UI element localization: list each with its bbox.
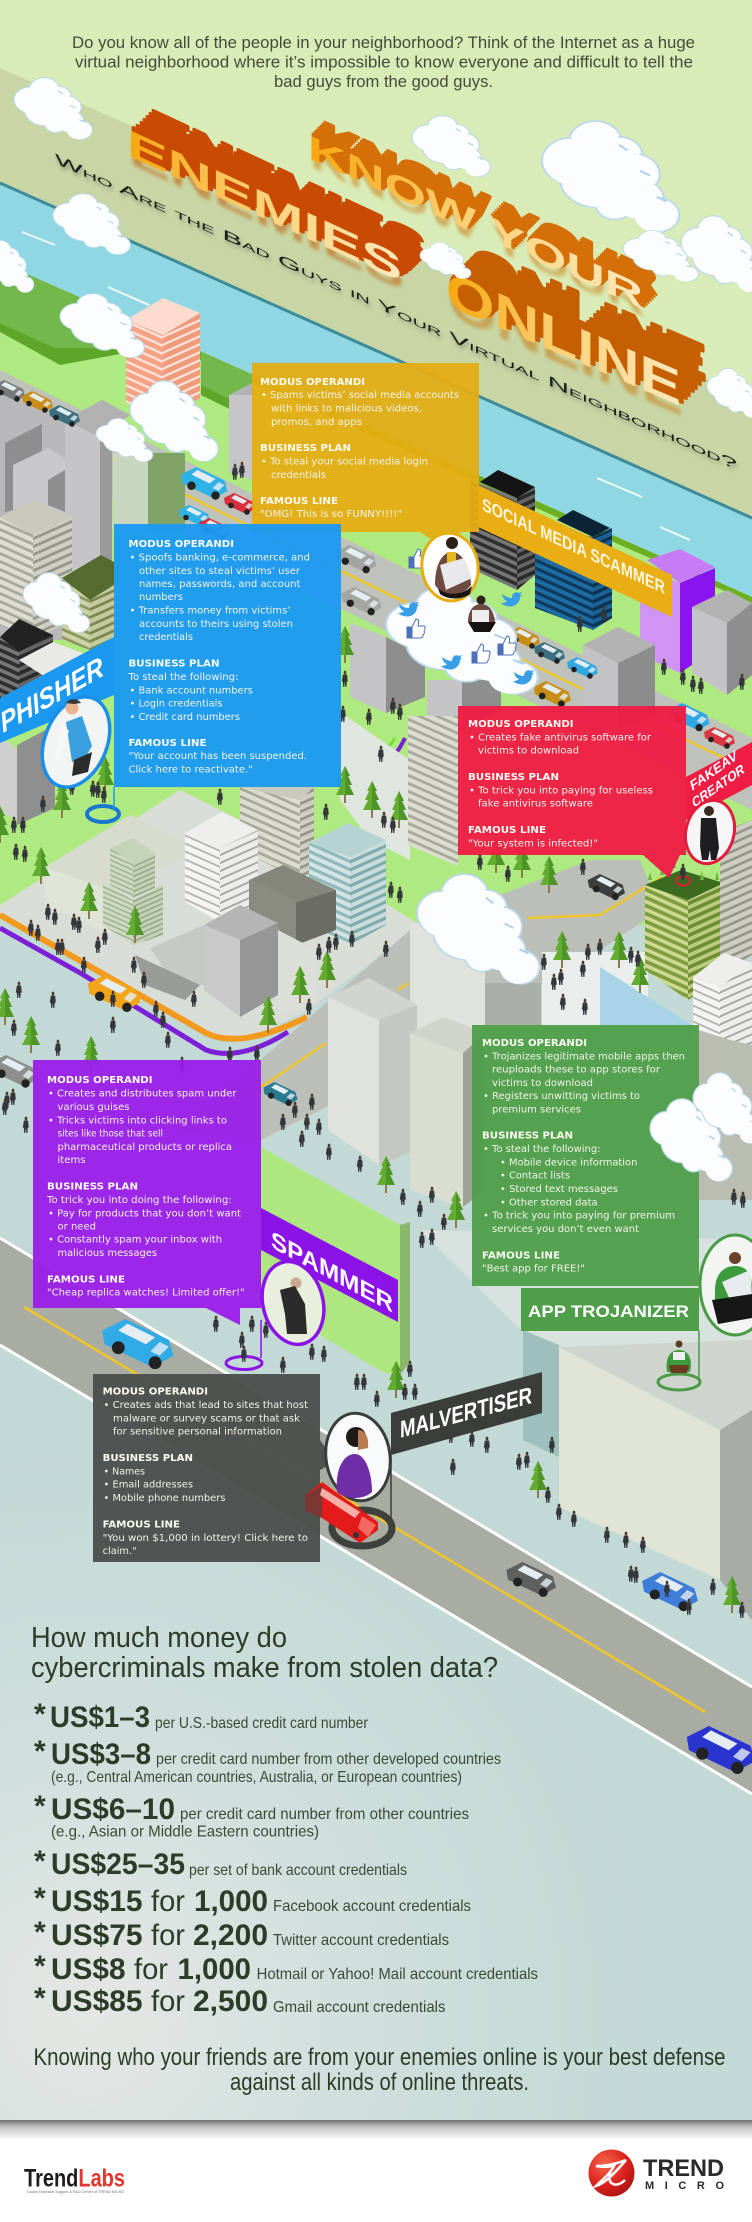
panel: spammer bbox=[33, 1060, 261, 1325]
panel: malvertiser: malware or survey scams or that ask bbox=[113, 1413, 300, 1424]
panel: phisher: • Bank account numbers bbox=[130, 686, 253, 696]
building: grey centre 2 bbox=[427, 680, 501, 730]
panel: phisher: • Transfers money from victims’ bbox=[130, 606, 290, 617]
panel: social media scammer: MODUS OPERANDI bbox=[260, 377, 365, 388]
portrait: social media scammer bbox=[418, 529, 482, 605]
panel: fakeav creator: FAMOUS LINE bbox=[468, 825, 546, 836]
panel: phisher bbox=[114, 524, 341, 787]
cloud near green panel bbox=[417, 874, 540, 984]
green and purple paths near phisher bbox=[342, 735, 405, 766]
panel: app trojanizer: • Contact lists bbox=[500, 1171, 570, 1182]
panel: spammer: malicious messages bbox=[58, 1248, 157, 1259]
title block bbox=[55, 102, 738, 477]
panel: phisher: credentials bbox=[139, 632, 193, 643]
closing statement bbox=[34, 2044, 726, 2096]
price 2: * bbox=[34, 1735, 46, 1768]
lower road bbox=[0, 1238, 752, 1794]
panel: social media scammer bbox=[252, 363, 479, 545]
marker: phisher bbox=[87, 787, 119, 822]
building: grey yellow box backdrop bbox=[229, 383, 252, 480]
title line: Know Your: KNOW YOUR bbox=[322, 114, 657, 303]
panel: phisher: BUSINESS PLAN bbox=[128, 658, 220, 670]
intro text bbox=[72, 34, 695, 91]
building: pale green stack bbox=[103, 838, 163, 945]
price 3: per credit card number from other countries bbox=[180, 1806, 469, 1823]
white plaza bbox=[542, 952, 648, 1027]
portrait: app trojanizer bbox=[700, 1235, 752, 1335]
panel: phisher: • Credit card numbers bbox=[130, 712, 240, 723]
building: green fakeav tower bbox=[645, 860, 724, 1000]
title line: Online: ONLINE bbox=[463, 244, 698, 401]
building: light blue bbox=[600, 967, 695, 1040]
panel: fakeav creator: • To trick you into paying for useless bbox=[469, 786, 653, 797]
panel: app trojanizer: premium services bbox=[492, 1104, 581, 1115]
panel: app trojanizer: services you don’t even want bbox=[492, 1224, 639, 1235]
price 4 bbox=[34, 1845, 407, 1881]
price 7: US$8 bbox=[51, 1953, 126, 1986]
price 3: * bbox=[34, 1790, 46, 1823]
building: tall pale 2 bbox=[410, 1017, 485, 1207]
panel: malvertiser: FAMOUS LINE bbox=[103, 1519, 180, 1530]
banner: fakeav creator: FAKEAV bbox=[689, 748, 739, 795]
subtitle bbox=[55, 152, 738, 477]
panel: malvertiser: BUSINESS PLAN bbox=[103, 1453, 193, 1464]
panel: app trojanizer: • Trojanizes legitimate mobile apps then bbox=[483, 1052, 685, 1062]
portrait: fakeav creator bbox=[679, 795, 741, 869]
panel: phisher: • Login credentials bbox=[130, 698, 222, 710]
panel: spammer: items bbox=[58, 1155, 86, 1166]
intro text: virtual neighborhood where it’s impossible to know everyone and difficult to tell the bbox=[75, 54, 693, 72]
panel: app trojanizer: • Other stored data bbox=[500, 1197, 598, 1208]
heading: cybercriminals make from stolen data? bbox=[31, 1652, 498, 1684]
building: beige striped left bbox=[0, 500, 72, 640]
banner: app trojanizer: APP TROJANIZER bbox=[528, 1302, 689, 1321]
building: purple bbox=[640, 549, 715, 673]
title line: Online: ONLINE bbox=[467, 240, 702, 397]
marker: malvertiser bbox=[332, 1455, 392, 1546]
river bbox=[0, 182, 752, 597]
panel: spammer: • Tricks victims into clicking links to bbox=[48, 1115, 227, 1126]
panel: spammer: MODUS OPERANDI bbox=[47, 1075, 152, 1086]
panel: app trojanizer: • Mobile device information bbox=[500, 1158, 637, 1169]
panel: social media scammer: • Spams victims’ social media accounts bbox=[261, 390, 459, 401]
panel: malvertiser: MODUS OPERANDI bbox=[103, 1387, 208, 1398]
building: grey far right bbox=[692, 590, 752, 695]
price 5 bbox=[34, 1882, 471, 1918]
title line: Know Your: KNOW YOUR bbox=[312, 124, 647, 313]
marker: app trojanizer bbox=[658, 1331, 700, 1390]
price 5: 1,000 bbox=[194, 1885, 268, 1918]
logo: Trend Micro: TREND bbox=[643, 2155, 724, 2182]
title line: Online: ONLINE bbox=[460, 247, 695, 404]
panel: app trojanizer: reuploads these to app stores for bbox=[492, 1065, 661, 1076]
price 6: US$75 bbox=[51, 1919, 142, 1952]
upper road bbox=[0, 370, 752, 810]
title line: Online: ONLINE bbox=[456, 251, 691, 408]
price 7: * bbox=[34, 1950, 46, 1983]
panel: social media scammer: • To steal your social media login bbox=[261, 456, 428, 468]
panel: fakeav creator bbox=[458, 706, 686, 878]
price 1: * bbox=[34, 1698, 46, 1731]
panel: app trojanizer: FAMOUS LINE bbox=[482, 1250, 560, 1261]
panel: fakeav creator: BUSINESS PLAN bbox=[468, 772, 559, 783]
building: navy striped bbox=[535, 510, 612, 630]
price 8: US$85 bbox=[51, 1985, 142, 2018]
price 8 bbox=[34, 1982, 446, 2018]
building: tall pale bbox=[328, 978, 417, 1165]
price 4: * bbox=[34, 1845, 46, 1878]
footer bbox=[0, 2120, 752, 2222]
title line: Know Your: KNOW YOUR bbox=[310, 136, 645, 325]
panel: spammer: FAMOUS LINE bbox=[47, 1274, 125, 1285]
pavement near phisher bbox=[340, 712, 410, 860]
price 8: for bbox=[151, 1985, 185, 2018]
intro text: bad guys from the good guys. bbox=[274, 73, 493, 91]
panel: social media scammer: FAMOUS LINE bbox=[260, 496, 338, 507]
plaza bbox=[0, 790, 420, 1042]
building: teal striped bbox=[309, 823, 386, 945]
ground lime bbox=[0, 262, 752, 1000]
red truck bbox=[305, 1482, 378, 1543]
banner: fakeav creator bbox=[686, 742, 752, 820]
title line: Online: ONLINE bbox=[448, 271, 683, 428]
title line: Enemies: ENEMIES bbox=[127, 122, 402, 291]
portrait: phisher bbox=[30, 687, 122, 797]
panel: spammer: pharmaceutical products or replica bbox=[58, 1142, 232, 1153]
panel: phisher: To steal the following: bbox=[127, 672, 238, 683]
price 5: for bbox=[151, 1885, 185, 1918]
price 5: * bbox=[34, 1882, 46, 1915]
panel: fakeav creator: victims to download bbox=[478, 746, 579, 757]
panel: spammer: To trick you into doing the following: bbox=[46, 1195, 232, 1206]
panel: spammer: • Pay for products that you don’t want bbox=[48, 1208, 241, 1219]
section: stolen data prices bbox=[31, 1622, 726, 2096]
building: dark striped bbox=[470, 470, 535, 590]
panel: spammer: "Cheap replica watches! Limited offer!" bbox=[47, 1287, 245, 1298]
lower ground bbox=[0, 915, 752, 2120]
title line: Know Your: KNOW YOUR bbox=[314, 122, 649, 311]
panel: phisher: names, passwords, and account bbox=[139, 579, 301, 590]
price 5: US$15 bbox=[51, 1885, 142, 1918]
price 2: per credit card number from other developed countries bbox=[156, 1751, 501, 1768]
panel: malvertiser: claim." bbox=[103, 1546, 137, 1557]
panel: app trojanizer: • Stored text messages bbox=[500, 1184, 618, 1195]
title line: Know Your: KNOW YOUR bbox=[320, 116, 655, 305]
price 6: Twitter account credentials bbox=[273, 1932, 449, 1949]
panel: malvertiser: for sensitive personal information bbox=[113, 1427, 282, 1438]
title line: Enemies: ENEMIES bbox=[150, 102, 425, 271]
marker: fakeav creator bbox=[676, 864, 690, 886]
building: grey centre bbox=[350, 623, 425, 713]
price 6: 2,200 bbox=[193, 1919, 268, 1952]
panel: fakeav creator: MODUS OPERANDI bbox=[468, 719, 574, 730]
panel: social media scammer: BUSINESS PLAN bbox=[260, 443, 351, 454]
panel: spammer: various guises bbox=[58, 1102, 130, 1113]
building: pale green bbox=[113, 453, 185, 530]
building: olive bbox=[62, 555, 114, 650]
intro text: Do you know all of the people in your neighborhood? Think of the Internet as a huge bbox=[72, 34, 695, 52]
figure: scammer on cloud bbox=[468, 596, 496, 632]
banner: app trojanizer bbox=[521, 1288, 699, 1331]
lime spammer block bbox=[261, 1147, 410, 1375]
logo: Trend Micro bbox=[588, 2150, 724, 2196]
building: low tiers and awning bbox=[135, 925, 316, 1015]
panel: app trojanizer: • To steal the following: bbox=[483, 1144, 600, 1155]
panel: app trojanizer: MODUS OPERANDI bbox=[482, 1038, 587, 1049]
title line: Know Your: KNOW YOUR bbox=[318, 118, 653, 307]
building: grey cluster left bbox=[0, 392, 130, 640]
banner: social media scammer: SOCIAL MEDIA SCAMMER bbox=[482, 495, 665, 599]
trees bbox=[0, 626, 741, 1613]
portrait: spammer bbox=[254, 1255, 332, 1351]
title line: Online: ONLINE bbox=[453, 254, 688, 411]
building: beige right edge bbox=[720, 820, 752, 975]
panel: app trojanizer: • To trick you into paying for premium bbox=[483, 1211, 675, 1222]
panel: app trojanizer: "Best app for FREE!" bbox=[482, 1263, 585, 1274]
price 1: per U.S.-based credit card number bbox=[155, 1715, 369, 1732]
panel: spammer: BUSINESS PLAN bbox=[47, 1182, 138, 1193]
title line: Online: ONLINE bbox=[471, 236, 706, 393]
panel: app trojanizer: • Registers unwitting victims to bbox=[483, 1091, 640, 1102]
price 1: US$1–3 bbox=[50, 1701, 150, 1734]
panel: spammer: • Creates and distributes spam under bbox=[48, 1089, 237, 1100]
closing statement: against all kinds of online threats. bbox=[230, 2069, 529, 2096]
title line: Enemies: ENEMIES bbox=[130, 119, 405, 288]
title line: Enemies: ENEMIES bbox=[134, 117, 409, 286]
price 4: US$25–35 bbox=[51, 1848, 185, 1881]
building: pale beside green box bbox=[699, 1030, 752, 1200]
panel: fakeav creator: • Creates fake antivirus software for bbox=[469, 733, 652, 744]
heading: How much money do bbox=[31, 1622, 287, 1654]
price 2: (e.g., Central American countries, Australia, or European countries) bbox=[51, 1769, 462, 1786]
panel: malvertiser: "You won $1,000 in lottery! Click here to bbox=[103, 1533, 308, 1544]
building: grey mid right bbox=[583, 627, 655, 730]
building: pale block right of centre bbox=[410, 923, 541, 1040]
heading bbox=[31, 1622, 498, 1684]
salmon tower bbox=[126, 298, 200, 418]
price 2 bbox=[34, 1735, 501, 1786]
building: white striped bbox=[185, 812, 258, 922]
title line: Enemies: ENEMIES bbox=[138, 114, 413, 283]
panel: phisher: other sites to steal victims’ user bbox=[139, 566, 301, 577]
panel: fakeav creator: fake antivirus software bbox=[478, 799, 593, 810]
clouds bbox=[0, 78, 752, 1181]
panel: malvertiser bbox=[93, 1374, 335, 1562]
orange and purple paths bbox=[0, 915, 307, 1053]
price 8: Gmail account credentials bbox=[273, 1999, 446, 2016]
title line: Enemies: ENEMIES bbox=[141, 111, 416, 280]
panel: social media scammer: credentials bbox=[271, 470, 326, 481]
panel: app trojanizer: BUSINESS PLAN bbox=[482, 1131, 573, 1142]
banner: malvertiser bbox=[391, 1372, 542, 1455]
building: beige striped centre bbox=[408, 716, 458, 866]
title line: Enemies: ENEMIES bbox=[144, 108, 419, 277]
olive band bbox=[0, 68, 752, 517]
panel: social media scammer: "OMG! This is so FUNNY!!!!" bbox=[260, 509, 402, 520]
price 5: Facebook account credentials bbox=[273, 1898, 471, 1915]
building: beige striped lower bbox=[240, 787, 314, 880]
price 8: 2,500 bbox=[193, 1985, 268, 2018]
building: white striped right bbox=[693, 953, 752, 1060]
pedestrians bbox=[2, 462, 746, 1618]
building: black top bbox=[0, 619, 88, 700]
price 7 bbox=[34, 1950, 538, 1986]
title line: Online bbox=[446, 236, 706, 428]
price 6 bbox=[34, 1916, 449, 1952]
panel: phisher: Click here to reactivate." bbox=[128, 764, 253, 776]
panel: fakeav creator: "Your system is infected!" bbox=[468, 838, 598, 850]
panel: phisher: • Spoofs banking, e-commerce, and bbox=[130, 552, 310, 564]
price 4: per set of bank account credentials bbox=[189, 1862, 407, 1879]
price 6: * bbox=[34, 1916, 46, 1949]
panel: phisher: "Your account has been suspended. bbox=[128, 751, 307, 762]
panel: app trojanizer: victims to download bbox=[492, 1078, 593, 1089]
panel: phisher: accounts to theirs using stolen bbox=[139, 619, 293, 630]
panel: malvertiser: • Email addresses bbox=[104, 1480, 193, 1491]
panel: social media scammer: promos, and apps bbox=[271, 417, 362, 428]
title line: Enemies bbox=[127, 102, 425, 299]
price 7: for bbox=[134, 1953, 168, 1986]
logo: Trend Micro: MICRO bbox=[645, 2180, 724, 2192]
building: dark grey block bbox=[249, 865, 336, 945]
subtitle: Who Are the Bad Guys in Your Virtual Neighborhood? bbox=[55, 152, 737, 474]
portrait: malvertiser bbox=[320, 1409, 396, 1505]
building: grey under phisher bbox=[0, 725, 55, 825]
price 7: Hotmail or Yahoo! Mail account credentials bbox=[257, 1966, 538, 1983]
title line: Know Your: KNOW YOUR bbox=[316, 120, 651, 309]
vehicles bbox=[0, 380, 752, 1774]
building: pale wide bbox=[45, 815, 200, 935]
price 2: US$3–8 bbox=[51, 1738, 151, 1771]
title line: Enemies: ENEMIES bbox=[147, 105, 422, 274]
panel: malvertiser: • Mobile phone numbers bbox=[104, 1493, 225, 1504]
price 3 bbox=[34, 1790, 469, 1840]
panel: malvertiser: • Names bbox=[104, 1466, 145, 1477]
price 3: US$6–10 bbox=[51, 1793, 175, 1826]
marker: spammer bbox=[226, 1320, 262, 1370]
panel: spammer: • Constantly spam your inbox with bbox=[48, 1235, 222, 1246]
price 3: (e.g., Asian or Middle Eastern countries) bbox=[51, 1824, 319, 1840]
panel: phisher: MODUS OPERANDI bbox=[128, 539, 234, 550]
building: grey front bbox=[204, 905, 278, 1017]
price 1 bbox=[34, 1698, 369, 1734]
river bank green bbox=[0, 262, 752, 603]
price 8: * bbox=[34, 1982, 46, 2015]
panel: phisher: numbers bbox=[139, 592, 183, 603]
panel: spammer: or need bbox=[58, 1222, 96, 1233]
title line: Know Your: KNOW YOUR bbox=[310, 126, 645, 315]
price 6: for bbox=[151, 1919, 185, 1952]
banner: spammer: SPAMMER bbox=[271, 1226, 393, 1319]
logo: TrendLabs: Global Technical Support & R&D Center of TREND MICRO bbox=[27, 2190, 124, 2194]
logo: TrendLabs: TrendLabs bbox=[24, 2164, 125, 2192]
panel: app trojanizer bbox=[472, 1025, 699, 1286]
title line: Online: ONLINE bbox=[449, 258, 684, 415]
social media cloud cluster bbox=[386, 549, 538, 694]
price 7: 1,000 bbox=[178, 1953, 251, 1986]
panel: social media scammer: with links to malicious videos, bbox=[271, 404, 422, 414]
title line: Know Your bbox=[308, 114, 657, 325]
subtitle: Who Are the Bad Guys in Your Virtual Neighborhood? bbox=[56, 155, 738, 477]
title line: Enemies: ENEMIES bbox=[129, 130, 404, 299]
panel: phisher: FAMOUS LINE bbox=[128, 738, 207, 749]
title line: Online: ONLINE bbox=[446, 261, 681, 418]
cross road bbox=[180, 860, 662, 1140]
app trojanizer building bbox=[420, 1230, 752, 1620]
title line: Know Your: KNOW YOUR bbox=[308, 128, 643, 317]
banner: phisher: PHISHER bbox=[0, 651, 107, 739]
panel: spammer: sites like those that sell bbox=[58, 1128, 163, 1139]
banner: malvertiser: MALVERTISER bbox=[400, 1382, 532, 1444]
panel: malvertiser: • Creates ads that lead to sites that host bbox=[104, 1400, 308, 1411]
